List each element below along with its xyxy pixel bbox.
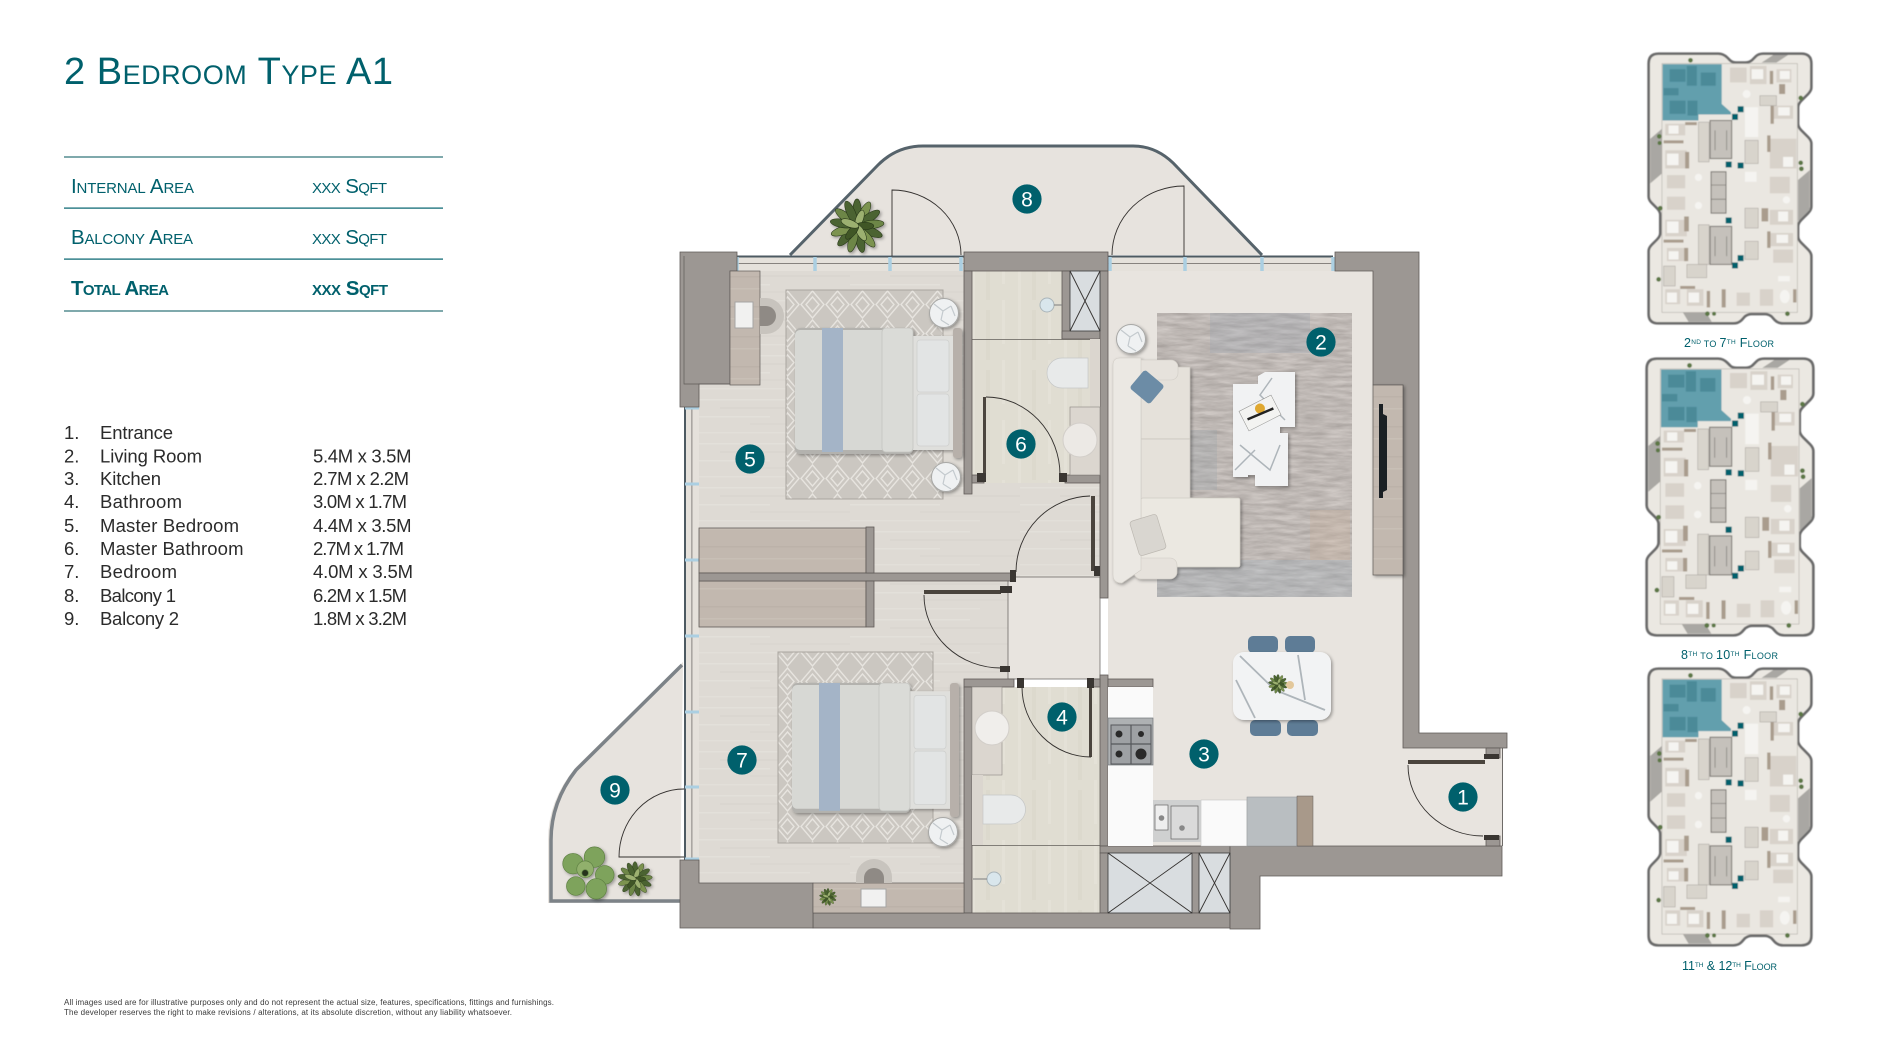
vanity bbox=[972, 687, 1002, 775]
label: 8th to 10th floor: LOOR bbox=[1752, 651, 1778, 661]
nightstand bbox=[928, 818, 958, 846]
floors bbox=[699, 271, 1502, 913]
basin bbox=[975, 711, 1009, 745]
area table bbox=[64, 156, 443, 312]
room legend: Bedroom bbox=[100, 561, 177, 582]
chair bbox=[856, 859, 892, 883]
row: total area: XXX SQFT bbox=[312, 277, 388, 300]
desk plant bbox=[819, 888, 837, 906]
marker 2 bbox=[1306, 327, 1336, 357]
disclaimer bbox=[64, 998, 554, 1017]
marker 2: 2 bbox=[1315, 332, 1327, 354]
marker 3: 3 bbox=[1198, 744, 1210, 766]
marker 9 bbox=[600, 775, 630, 805]
row: internal area: INTERNAL AREA bbox=[71, 175, 194, 198]
marker 1: 1 bbox=[1457, 786, 1469, 810]
label: 8th to 10th floor: TH bbox=[1731, 651, 1740, 658]
title: 2 BEDROOM TYPE A1 bbox=[64, 51, 393, 93]
room legend: 5. bbox=[64, 515, 79, 536]
label: 11th and 12th floor: TH bbox=[1695, 962, 1704, 969]
bedroom rug bbox=[778, 652, 933, 843]
living room furniture bbox=[1113, 324, 1403, 583]
room legend: 1. bbox=[64, 422, 79, 443]
bed bbox=[792, 682, 962, 820]
label: 11th and 12th floor: F bbox=[1741, 959, 1752, 973]
label: 2nd to 7th floor: TO bbox=[1701, 339, 1719, 349]
key plan: 2nd to 7th floor bbox=[1649, 54, 1811, 323]
shower head bbox=[973, 872, 1001, 886]
room legend: Balcony 1 bbox=[100, 585, 176, 606]
marker 1 bbox=[1448, 782, 1478, 812]
row: balcony area: XXX SQFT bbox=[312, 226, 387, 249]
room legend: 1.8M x 3.2M bbox=[313, 608, 407, 629]
coffee table bbox=[1233, 372, 1295, 486]
room legend: 7. bbox=[64, 561, 79, 582]
label: 11th and 12th floor: TH bbox=[1732, 962, 1741, 969]
label: 8th to 10th floor: 8 bbox=[1681, 648, 1688, 662]
laptop bbox=[861, 889, 886, 907]
bathroom fixtures bbox=[972, 687, 1026, 886]
label: 8th to 10th floor: TH bbox=[1688, 651, 1698, 658]
basin bbox=[1063, 423, 1097, 457]
book bbox=[1239, 395, 1281, 431]
marker 4 bbox=[1047, 702, 1077, 732]
plant: balcony 2 large bbox=[563, 847, 614, 899]
label: 2nd to 7th floor: 7 bbox=[1719, 336, 1726, 350]
window strips bbox=[684, 256, 1333, 860]
floor plan bbox=[548, 146, 1507, 929]
sofa bbox=[1113, 358, 1240, 583]
disclaimer: The developer reserves the right to make revisions / alterations, at its absolute discretion, without any liability whatsoever. bbox=[64, 1008, 512, 1017]
label: 8th to 10th floor: 10 bbox=[1716, 648, 1730, 662]
key plan: 8th to 10th floor bbox=[1647, 359, 1813, 635]
closets bbox=[699, 528, 866, 627]
row: internal area bbox=[71, 175, 387, 198]
room legend: 6.2M x 1.5M bbox=[313, 585, 407, 606]
room legend: Entrance bbox=[100, 422, 173, 443]
sink bbox=[1153, 800, 1201, 842]
marker 7 bbox=[727, 745, 757, 775]
disclaimer: All images used are for illustrative purposes only and do not represent the actual size, features, specifications, fittings and furnishings. bbox=[64, 998, 554, 1007]
label: 2nd to 7th floor: TH bbox=[1727, 339, 1736, 346]
blue cushion bbox=[1129, 369, 1165, 405]
desk bbox=[730, 271, 760, 385]
room legend: Living Room bbox=[100, 446, 202, 466]
room legend: 2. bbox=[64, 446, 79, 466]
room legend: 4.4M x 3.5M bbox=[313, 515, 412, 536]
walls bbox=[680, 252, 1507, 929]
master bedroom rug bbox=[786, 290, 943, 499]
label: 11th and 12th floor: 11 bbox=[1682, 959, 1695, 973]
room legend: 3. bbox=[64, 468, 79, 489]
chairs bbox=[1248, 636, 1318, 736]
room legend: 8. bbox=[64, 585, 79, 606]
room legend: Master Bathroom bbox=[100, 538, 244, 559]
marker 4: 4 bbox=[1056, 706, 1068, 730]
label: 2nd to 7th floor: F bbox=[1736, 336, 1748, 350]
key plan: 11th and 12th floor bbox=[1649, 669, 1811, 945]
plant: balcony 2 small bbox=[617, 862, 653, 897]
room legend: Balcony 2 bbox=[100, 608, 179, 629]
bedroom furniture bbox=[792, 683, 964, 913]
room legend: 4. bbox=[64, 491, 79, 512]
shafts bbox=[1070, 271, 1230, 913]
door swings bbox=[619, 186, 1499, 857]
label: 2nd to 7th floor: ND bbox=[1691, 339, 1701, 346]
table bbox=[1233, 652, 1331, 720]
chair bbox=[760, 298, 784, 334]
hob bbox=[1108, 718, 1153, 765]
vanity bbox=[1070, 407, 1100, 475]
room legend: 5.4M x 3.5M bbox=[313, 446, 412, 466]
room legend: 3.0M x 1.7M bbox=[313, 491, 407, 512]
marker 6 bbox=[1006, 429, 1036, 459]
marker 7: 7 bbox=[736, 750, 748, 772]
room legend: 9. bbox=[64, 608, 79, 629]
counter bbox=[1108, 687, 1153, 846]
label: 2nd to 7th floor: 2 bbox=[1684, 336, 1691, 350]
marker 8 bbox=[1012, 184, 1042, 214]
nightstand bottom bbox=[932, 462, 960, 492]
row: balcony area bbox=[71, 226, 387, 249]
label: 2nd to 7th floor: LOOR bbox=[1748, 339, 1774, 349]
plant: balcony 1 bbox=[830, 199, 884, 253]
tv unit bbox=[1373, 385, 1403, 575]
label: 11th and 12th floor: & 12 bbox=[1703, 959, 1732, 973]
room legend: 2.7M x 2.2M bbox=[313, 468, 409, 489]
row: balcony area: BALCONY AREA bbox=[71, 226, 193, 249]
room legend bbox=[64, 422, 413, 629]
marker 8: 8 bbox=[1021, 188, 1033, 212]
shower head bbox=[1040, 298, 1062, 312]
label: 8th to 10th floor: F bbox=[1740, 648, 1752, 662]
row: total area bbox=[71, 277, 388, 300]
living rug bbox=[1157, 313, 1352, 597]
room legend: 2.7M x 1.7M bbox=[313, 538, 404, 559]
laptop bbox=[735, 302, 753, 328]
fridge bbox=[1247, 797, 1297, 846]
room legend: 4.0M x 3.5M bbox=[313, 561, 413, 582]
nightstand top bbox=[930, 298, 958, 328]
white cushion bbox=[1129, 514, 1167, 556]
room legend: 6. bbox=[64, 538, 79, 559]
marker 5: 5 bbox=[744, 448, 756, 472]
label: 11th and 12th floor: LOOR bbox=[1752, 962, 1778, 972]
toilet bbox=[983, 795, 1026, 824]
centerpiece bbox=[1268, 674, 1294, 694]
kitchen bbox=[1108, 687, 1313, 846]
master bathroom fixtures bbox=[1040, 298, 1100, 475]
room legend: Master Bedroom bbox=[100, 515, 239, 536]
room legend: Bathroom bbox=[100, 491, 182, 512]
marker 3 bbox=[1189, 739, 1219, 769]
marker 5 bbox=[735, 444, 765, 474]
ledge bbox=[1090, 339, 1100, 407]
cabinet bbox=[1297, 796, 1313, 846]
side table bbox=[1116, 324, 1146, 354]
dining set bbox=[1233, 636, 1331, 736]
bottom counter bbox=[1201, 800, 1247, 846]
bed bbox=[794, 328, 965, 462]
marker 6: 6 bbox=[1015, 434, 1027, 456]
balcony 2 bbox=[548, 662, 683, 903]
label: 8th to 10th floor: TO bbox=[1698, 651, 1716, 661]
toilet bbox=[1047, 358, 1088, 388]
tv bbox=[1379, 404, 1387, 498]
room legend: Kitchen bbox=[100, 468, 161, 489]
row: internal area: XXX SQFT bbox=[312, 175, 387, 198]
marker 9: 9 bbox=[609, 780, 621, 802]
master bedroom furniture bbox=[730, 271, 962, 492]
desk bbox=[813, 883, 964, 913]
ledge bbox=[972, 775, 983, 845]
balcony 1 bbox=[790, 146, 1262, 255]
row: total area: TOTAL AREA bbox=[71, 277, 169, 300]
